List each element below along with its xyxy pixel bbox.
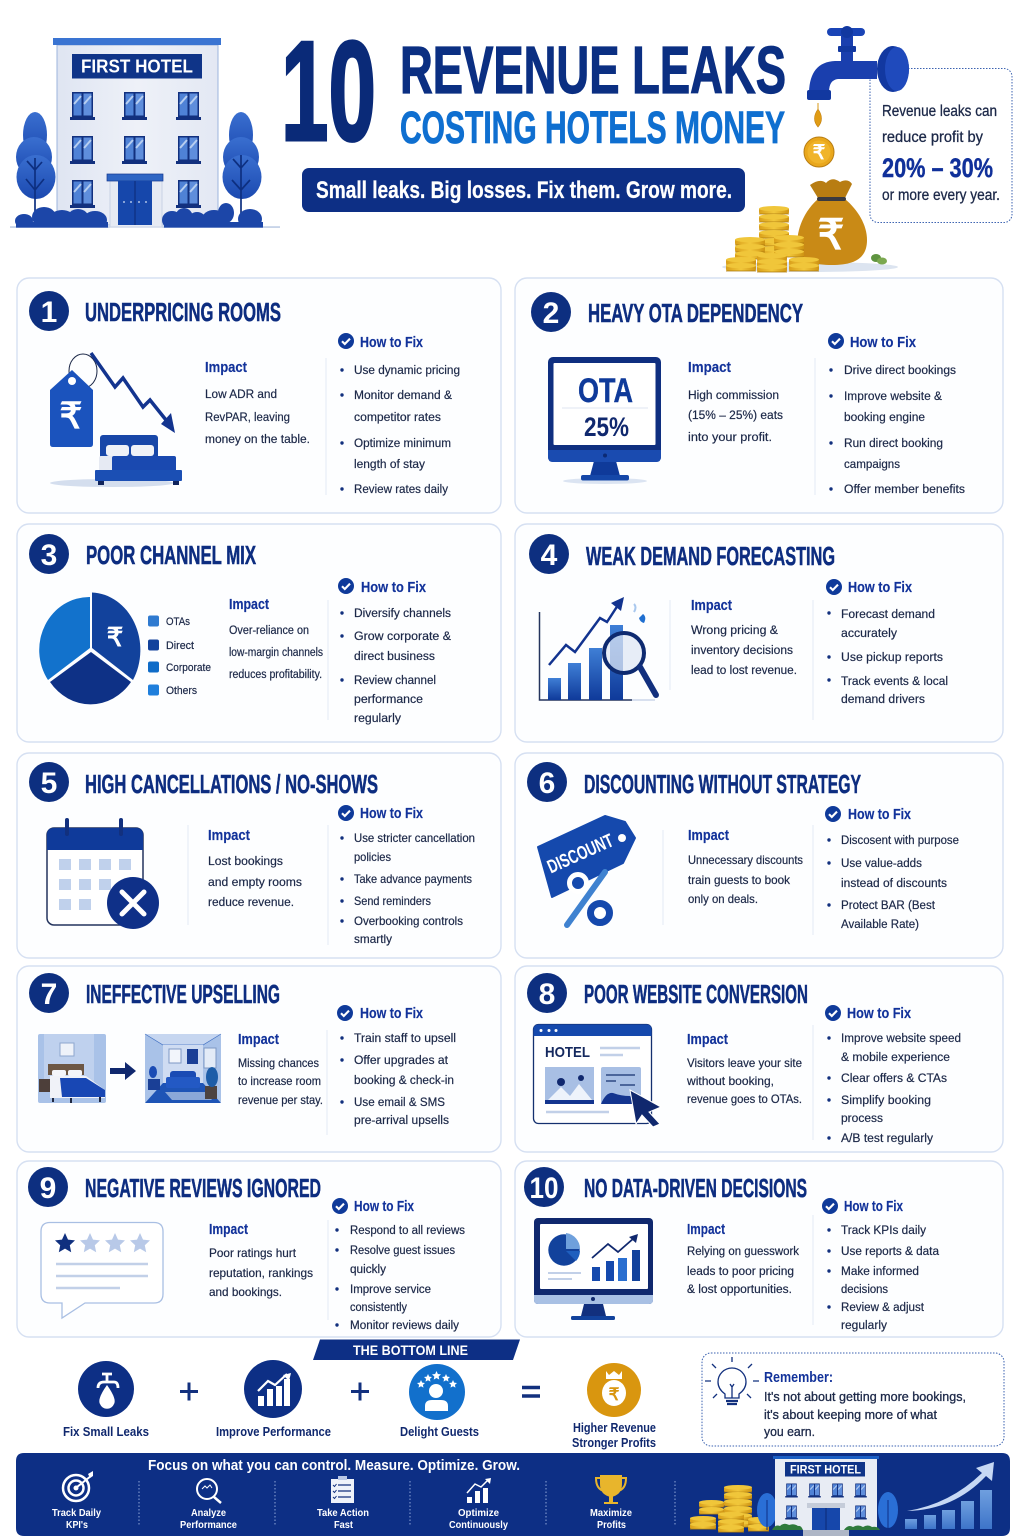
number badge 6: 6 [539,767,555,800]
formula: delight guests: Delight Guests [400,1425,479,1439]
how to fix 3: Diversify channels [354,606,451,620]
impact text 6 [688,827,803,906]
how to fix 10: decisions [841,1284,888,1296]
step: maximize profits: Profits [597,1519,626,1531]
formula: higher revenue: Higher Revenue [573,1421,656,1435]
pie chart [39,592,140,704]
how to fix 8: process [841,1111,883,1125]
how to fix 8: & mobile experience [841,1050,950,1064]
how to fix 4 [826,579,948,706]
formula: fix small leaks [63,1361,149,1439]
formula: fix small leaks: Fix Small Leaks [63,1425,149,1439]
impact text 7: Impact [238,1031,279,1048]
formula: improve performance [216,1360,331,1439]
impact text 4: Impact [691,597,732,614]
chart legend [148,616,211,697]
chart legend: Others [166,685,197,697]
how to fix 2: How to Fix [850,335,916,351]
how to fix 6: How to Fix [848,807,911,823]
title line 1: REVENUE LEAKS [400,33,786,108]
icon: discount tag: DISCOUNT [544,830,617,878]
impact text 10: Relying on guesswork [687,1246,799,1258]
step: maximize profits [590,1475,632,1531]
equals sign [522,1388,540,1396]
panel: 6 discounting without strategy [515,753,1003,958]
impact text 4 [691,597,797,677]
footer band [16,1453,1010,1536]
how to fix 9: Monitor reviews daily [350,1320,459,1332]
how to fix 5: policies [354,850,391,864]
how to fix 7 [337,1005,456,1127]
how to fix 1 [338,333,460,496]
icon: OTA monitor [548,357,661,484]
how to fix 2: booking engine [844,410,925,424]
hotel illustration [0,38,290,236]
number badge 4 [529,534,569,574]
number badge 7: 7 [41,978,57,1011]
how to fix 9: quickly [350,1264,386,1276]
number badge 7 [29,973,69,1013]
how to fix 3: performance [354,692,423,706]
how to fix 1: How to Fix [360,335,423,351]
impact text 9 [209,1221,313,1299]
impact text 8 [686,1031,802,1106]
heading 7: INEFFECTIVE UPSELLING [86,981,280,1009]
number badge 9: 9 [40,1172,56,1205]
impact text 6: train guests to book [688,873,790,887]
impact text 1: money on the table. [205,432,310,446]
how to fix 9: Resolve guest issues [350,1245,455,1257]
heading 8: POOR WEBSITE CONVERSION [584,981,808,1009]
panel: 2 heavy OTA dependency [515,278,1003,513]
number badge 5: 5 [41,767,57,800]
impact text 2: Impact [688,359,731,376]
impact text 8: without booking, [686,1074,774,1088]
step: take action fast: Take Action [317,1507,369,1519]
how to fix 6: Use value-adds [841,856,922,870]
how to fix 6: Discosent with purpose [841,833,959,847]
how to fix 1: competitor rates [354,410,441,424]
number badge 6 [527,762,567,802]
callout: remember: It's not about getting more bookings, [764,1390,966,1404]
how to fix 5: How to Fix [360,806,423,822]
how to fix 5: Take advance payments [354,872,472,886]
how to fix 10: How to Fix [844,1199,903,1215]
impact text 8: Visitors leave your site [687,1056,802,1070]
impact text 10: & lost opportunities. [687,1284,792,1296]
impact text 2: into your profit. [688,430,772,444]
plus sign [351,1382,369,1400]
impact text 7: to increase room [238,1074,321,1088]
how to fix 4: Use pickup reports [841,650,943,664]
icon: review speech bubble [41,1222,163,1318]
impact text 7: revenue per stay. [238,1093,323,1107]
plus sign [180,1382,198,1400]
how to fix 2: Offer member benefits [844,482,965,496]
how to fix 10: Track KPIs daily [841,1225,926,1237]
how to fix 8 [825,1005,961,1145]
pie chart: ₹ [107,622,123,652]
how to fix 3: regularly [354,711,402,725]
chart legend: Corporate [166,662,211,674]
how to fix 9: Respond to all reviews [350,1225,465,1237]
how to fix 2: campaigns [844,457,900,471]
impact text 3: low-margin channels [229,647,323,659]
how to fix 5 [338,805,475,946]
how to fix 9 [332,1198,465,1332]
icon: rising chart with magnifier [540,597,656,700]
footer heading: Focus on what you can control. Measure. Optimize. Grow. [148,1458,520,1474]
impact text 7: Missing chances [238,1056,319,1070]
step: take action fast [317,1476,369,1531]
panel: 9 negative reviews ignored [17,1161,501,1337]
bottom line banner: THE BOTTOM LINE [353,1342,468,1358]
icon: OTA monitor: OTA [578,372,633,410]
how to fix 8: Simplify booking [841,1093,931,1107]
formula: delight guests [400,1364,479,1439]
how to fix 3: Grow corporate & [354,629,452,643]
how to fix 5: Send reminders [354,894,431,908]
how to fix 4: Forecast demand [841,607,935,621]
step: track daily KPIs [52,1471,101,1531]
how to fix 8: Clear offers & CTAs [841,1071,947,1085]
how to fix 10 [822,1198,940,1332]
number badge 5 [29,762,69,802]
impact text 2: High commission [688,388,779,402]
icon: upgraded suite [145,1034,221,1103]
impact text 8: revenue goes to OTAs. [687,1092,802,1106]
how to fix 2: Drive direct bookings [844,363,956,377]
how to fix 7: How to Fix [360,1006,423,1022]
panel: 3 poor channel mix [17,524,501,742]
hotel illustration: FIRST HOTEL [81,56,193,76]
how to fix 2 [828,333,965,496]
callout: remember [702,1353,1004,1446]
panel: 10 no data-driven decisions [515,1161,1003,1337]
how to fix 10: Make informed [841,1266,919,1278]
number badge 10 [524,1167,564,1207]
formula: higher revenue: Stronger Profits [572,1436,656,1450]
impact text 1 [205,359,310,446]
panel: 5 high cancellations / no-shows [17,753,501,958]
how to fix 7: Train staff to upsell [354,1031,456,1045]
number badge 3 [29,534,69,574]
icon: OTA monitor: 25% [584,412,629,442]
callout: profit reduction: Revenue leaks can [882,103,997,120]
number badge 2 [531,292,571,332]
impact text 9: Impact [209,1221,248,1238]
how to fix 1: length of stay [354,457,426,471]
step: optimize continuously: Continuously [449,1519,508,1531]
number badge 2: 2 [543,297,559,330]
how to fix 9: How to Fix [354,1199,414,1215]
callout: profit reduction: or more every year. [882,187,1000,204]
how to fix 1: Monitor demand & [354,388,453,402]
how to fix 2: Run direct booking [844,436,943,450]
impact text 3: Over-reliance on [229,625,309,637]
tagline banner: Small leaks. Big losses. Fix them. Grow more. [316,177,732,204]
impact text 5: Impact [208,827,250,844]
how to fix 9: Improve service [350,1284,431,1296]
how to fix 3: direct business [354,649,435,663]
panel: 8 poor website conversion [515,966,1003,1152]
chart legend: OTAs [166,616,190,628]
panel: 4 weak demand forecasting [515,524,1003,742]
heading 2: HEAVY OTA DEPENDENCY [588,300,803,328]
impact text 10 [687,1221,799,1296]
arrow: upgrade [110,1062,136,1080]
icon: price tag, falling arrow and bed: ₹ [60,395,82,436]
how to fix 4: How to Fix [848,580,912,596]
how to fix 10: Use reports & data [841,1246,940,1258]
how to fix 10: Review & adjust [841,1302,925,1314]
impact text 2 [688,359,783,444]
icon: rupee coin: ₹ [813,142,826,164]
number badge 9 [28,1167,68,1207]
step: maximize profits: Maximize [590,1507,632,1519]
icon: money bag and coins [722,179,898,272]
how to fix 4: Track events & local [841,674,948,688]
how to fix 6: Available Rate) [841,917,919,931]
impact text 10: Impact [687,1221,725,1238]
callout: remember: it's about keeping more of what [764,1408,938,1422]
impact text 4: Wrong pricing & [691,623,779,637]
step: analyze performance: Performance [180,1519,237,1531]
bottom line section [63,1340,1004,1450]
impact text 4: inventory decisions [691,643,793,657]
formula: improve performance: Improve Performance [216,1425,331,1439]
callout: profit reduction [870,68,1012,222]
how to fix 5: smartly [354,932,392,946]
step: analyze performance [180,1479,237,1531]
impact text 2: (15% – 25%) eats [688,408,783,422]
how to fix 6: instead of discounts [841,876,947,890]
how to fix 5: Use stricter cancellation [354,831,475,845]
icon: light bulb [705,1357,759,1404]
callout: remember: you earn. [764,1425,815,1439]
heading 9: NEGATIVE REVIEWS IGNORED [85,1175,321,1203]
impact text 3: reduces profitability. [229,669,322,681]
title number: 10 [281,12,376,171]
how to fix 3: How to Fix [361,580,426,596]
icon: hotel website and cursor [534,1024,661,1127]
icon: discount tag [538,816,635,925]
how to fix 10: regularly [841,1320,887,1332]
how to fix 1: Use dynamic pricing [354,363,460,377]
tagline banner [302,168,745,212]
impact text 9: and bookings. [209,1285,282,1299]
how to fix 3: Review channel [354,673,436,687]
how to fix 8: Improve website speed [841,1031,961,1045]
impact text 5: and empty rooms [208,875,302,889]
heading 5: HIGH CANCELLATIONS / NO-SHOWS [85,771,378,799]
title line 2: COSTING HOTELS MONEY [400,102,785,153]
how to fix 5: Overbooking controls [354,914,463,928]
heading 1: UNDERPRICING ROOMS [85,299,281,327]
number badge 1 [29,291,69,331]
bottom line banner [313,1340,520,1360]
number badge 1: 1 [41,296,57,329]
impact text 3: Impact [229,596,269,613]
how to fix 4: demand drivers [841,692,925,706]
step: analyze performance: Analyze [191,1507,226,1519]
how to fix 1: Review rates daily [354,482,449,496]
impact text 5 [208,827,302,909]
chart legend: Direct [166,640,194,652]
number badge 4: 4 [541,539,558,572]
impact text 4: lead to lost revenue. [691,663,797,677]
impact text 5: Lost bookings [208,854,283,868]
how to fix 6 [825,806,959,931]
callout: profit reduction: 20% – 30% [882,153,993,183]
heading 4: WEAK DEMAND FORECASTING [586,543,835,571]
number badge 8 [527,973,567,1013]
heading 6: DISCOUNTING WITHOUT STRATEGY [584,771,861,799]
how to fix 7: Offer upgrades at [354,1053,449,1067]
icon: coin stacks [690,1485,769,1532]
step: track daily KPIs: Track Daily [52,1507,101,1519]
how to fix 7: Use email & SMS [354,1095,445,1109]
panel: 7 ineffective upselling [17,966,501,1152]
how to fix 2: Improve website & [844,389,943,403]
impact text 8: Impact [687,1031,728,1048]
formula: higher revenue: ₹ [609,1385,620,1404]
icon: leaking faucet [807,26,909,127]
step: optimize continuously [449,1478,508,1531]
how to fix 1: Optimize minimum [354,436,451,450]
how to fix 8: How to Fix [847,1006,911,1022]
chart: growth bars with arrow [905,1462,994,1529]
impact text 1: Low ADR and [205,387,277,401]
icon: hotel website and cursor: HOTEL [545,1044,590,1061]
icon: hotel building: FIRST HOTEL [790,1462,861,1476]
icon: hotel building [757,1456,898,1536]
panel: 1 underpricing rooms [17,278,501,513]
step: track daily KPIs: KPI's [66,1519,88,1531]
how to fix 7: pre-arrival upsells [354,1113,449,1127]
number badge 3: 3 [41,539,57,572]
icon: price tag, falling arrow and bed [50,353,182,487]
icon: rupee coin [804,137,834,167]
number badge 8: 8 [539,978,555,1011]
impact text 7 [238,1031,323,1107]
header [0,12,1012,272]
heading 3: POOR CHANNEL MIX [86,542,256,570]
step: take action fast: Fast [334,1519,353,1531]
impact text 1: Impact [205,359,247,376]
icon: standard room [38,1034,106,1103]
how to fix 9: consistently [350,1302,407,1314]
impact text 3 [229,596,323,681]
formula: higher revenue [572,1363,656,1450]
how to fix 3 [338,578,452,725]
impact text 9: Poor ratings hurt [209,1246,297,1260]
how to fix 8: A/B test regularly [841,1131,934,1145]
callout: remember: Remember: [764,1370,833,1386]
impact text 5: reduce revenue. [208,895,294,909]
impact text 6: only on deals. [688,892,758,906]
icon: money bag and coins: ₹ [818,211,844,258]
how to fix 4: accurately [841,626,898,640]
step: optimize continuously: Optimize [458,1507,499,1519]
impact text 1: RevPAR, leaving [205,410,290,424]
callout: profit reduction: reduce profit by [882,129,983,146]
icon: analytics monitor [534,1218,653,1320]
impact text 10: leads to poor pricing [687,1266,794,1278]
impact text 6: Impact [688,827,729,844]
heading 10: NO DATA-DRIVEN DECISIONS [584,1175,807,1203]
impact text 6: Unnecessary discounts [688,853,803,867]
icon: cancelled calendar [47,818,159,929]
how to fix 6: Protect BAR (Best [841,898,936,912]
how to fix 7: booking & check-in [354,1073,454,1087]
number badge 10: 10 [530,1172,558,1205]
impact text 9: reputation, rankings [209,1266,313,1280]
